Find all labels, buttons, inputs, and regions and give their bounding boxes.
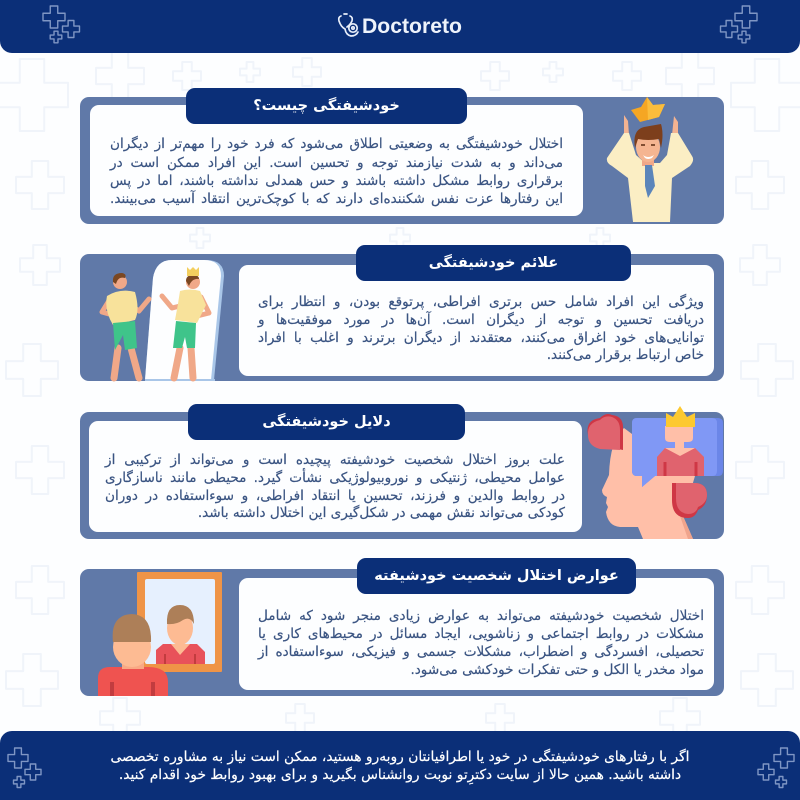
text box: symptoms [239,265,714,376]
text box: complications [239,578,714,690]
paragraph: complications: تحصیلی، افسردگی و اضطراب، مشکلات جسمی و فیزیکی، سوءاستفاده از [258,644,704,660]
paragraph: definition: می‌داند و به شدت نیازمند توجه و تحسین است. این افراد ممکن است در [110,155,563,171]
paragraph: definition: برقراری روابط مشکل داشته باشند و حس همدلی نداشته باشند، اما در پس [110,173,563,189]
icon: footer crosses right [757,747,795,788]
heading: causes [188,404,465,440]
panel: complications [80,558,724,696]
paragraph: complications: مواد مخدر یا الکل و حتی تفکرات خودکشی می‌شود. [410,662,704,678]
call to action text [110,748,690,784]
icon: header crosses left [42,5,80,44]
text box: definition [90,105,583,216]
paragraph: causes: کودکی می‌تواند نقش مهمی در شکل‌گیری این اختلال داشته باشد. [198,505,565,521]
paragraph: definition: این رفتارها عزت نفس شکننده‌ای دارند که با کوچک‌ترین انتقاد آسیب می‌بینند. [110,191,563,207]
paragraph: symptoms: خاص ارتباط برقرار می‌کنند. [547,347,704,363]
footer bar [0,731,800,800]
heading: causes: دلایل خودشیفتگی [262,414,391,430]
paragraph: complications [257,608,704,678]
paragraph: definition [109,136,563,207]
paragraph: causes: در روابط والدین و فرزند، تحسین یا انتقاد افراطی، و سوءاستفاده در دوران [105,488,565,504]
paragraph: causes [104,452,566,521]
call to action text: اگر با رفتارهای خودشیفتگی در خود یا اطرافیانتان روبه‌رو هستید، ممکن است نیاز به مشاوره تخصصی [110,749,690,765]
icon: footer crosses left [7,747,42,788]
paragraph: symptoms: توانایی‌های خود اغراق می‌کنند، معتقدند از دیگران برترند و اغلب با افراد [258,330,704,346]
icon: header crosses right [720,5,758,44]
heading: what is narcissism: خودشیفتگی چیست؟ [253,98,400,114]
heading: symptoms [356,245,631,281]
panel: causes [80,404,724,539]
call to action text: داشته باشید. همین حالا از سایت دکترِتو نوبت روانشناس بگیرید و برای بهبود روابط خود اقدام کنید. [119,767,681,783]
text box: causes [89,421,582,532]
heading: symptoms: علائم خودشیفتگی [429,255,558,271]
paragraph: complications: اختلال شخصیت خودشیفته می‌تواند به عوارض زیادی منجر شود که شامل [258,608,704,624]
icon: man with crown [606,97,694,222]
panel: what is narcissism [80,88,724,224]
heading: what is narcissism [186,88,467,124]
paragraph: causes: علت بروز اختلال شخصیت خودشیفته پیچیده است و می‌تواند از ترکیبی از [105,452,565,468]
heading: complications: عوارض اختلال شخصیت خودشیفته [374,568,619,584]
paragraph: symptoms: ویژگی این افراد شامل حس برتری افراطی، پرتوقع بودن، و انتظار برای [258,294,704,310]
paragraph: symptoms: دریافت تحسین و توجه از دیگران است. آن‌ها در مورد موفقیت‌ها و [258,312,704,328]
heading: complications [357,558,636,594]
paragraph: definition: اختلال خودشیفتگی به وضعیتی اطلاق می‌شود که فرد خود را مهم‌تر از دیگران [110,136,563,152]
paragraph: causes: عوامل محیطی، ژنتیکی و نوروبیولوژیکی نشأت گیرد. محیطی مانند ناسازگاری [105,470,565,486]
icon: head imagining crowned self [588,406,723,539]
logo: Doctoreto: Doctoreto [362,15,462,38]
panel: symptoms [80,245,724,382]
icon: person facing mirror [98,572,222,696]
paragraph: symptoms [257,294,704,363]
icon: man and crowned reflection in mirror [100,260,224,382]
header bar [0,0,800,53]
paragraph: complications: مشکلات در روابط اجتماعی و زناشویی، ایجاد مسائل در محیط‌های کاری یا [258,626,704,642]
